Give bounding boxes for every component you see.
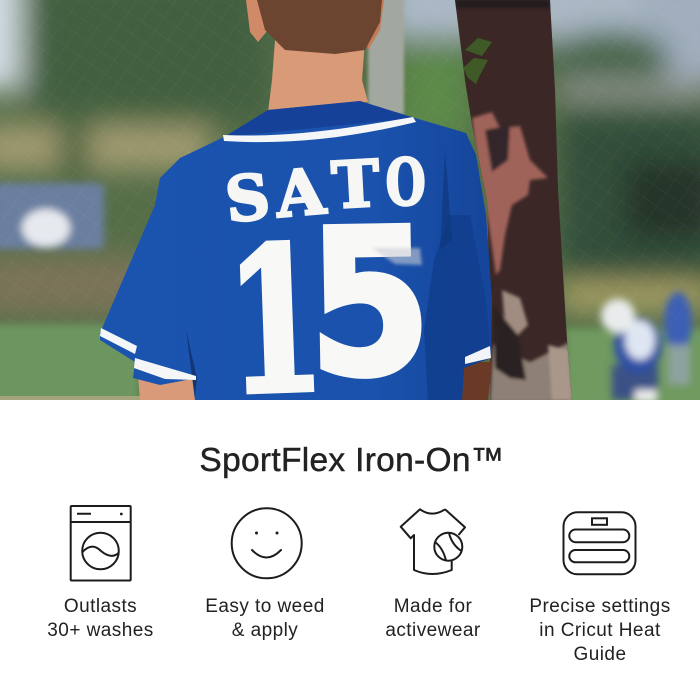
jersey name: SATO: S [222,160,273,237]
label: precise settings: Guide [574,644,626,665]
label: made for activewear: activewear [385,620,481,641]
jersey name: SATO: O [385,146,426,221]
label: made for activewear: Made for [394,596,472,617]
label: precise settings: in Cricut Heat [539,620,661,641]
blurred scoreboard [0,183,104,249]
blurred pole [368,0,404,115]
right sleeve cuff [465,346,491,364]
label: made for activewear [385,596,481,641]
tree trunk [455,0,575,402]
label: easy to weed: Easy to weed [205,596,325,617]
jersey name: SATO [222,146,426,237]
jersey number: 15 [223,186,433,439]
title: SportFlex Iron-On™ [199,442,505,479]
label: outlasts washes: 30+ washes [47,620,154,641]
shadow across the number [372,248,422,265]
label: precise settings: Precise settings [529,596,671,617]
label: outlasts washes [47,596,154,641]
blurred background [0,0,700,418]
jersey name: SATO: T [330,147,381,224]
jersey name: SATO: A [272,154,329,232]
ivy leaves [463,38,492,84]
blurred players [601,292,692,402]
label: precise settings [529,596,671,665]
jersey [100,101,492,400]
label: easy to weed: & apply [232,620,298,641]
boy's head and neck [246,0,384,112]
arms [138,362,492,400]
label: outlasts washes: Outlasts [64,596,137,617]
chain-link fence overlay [0,0,700,322]
collar piping [223,117,416,142]
label: easy to weed [205,596,325,641]
left sleeve cuff [100,328,196,380]
photo: boy in baseball jersey beside a tree [0,0,700,400]
